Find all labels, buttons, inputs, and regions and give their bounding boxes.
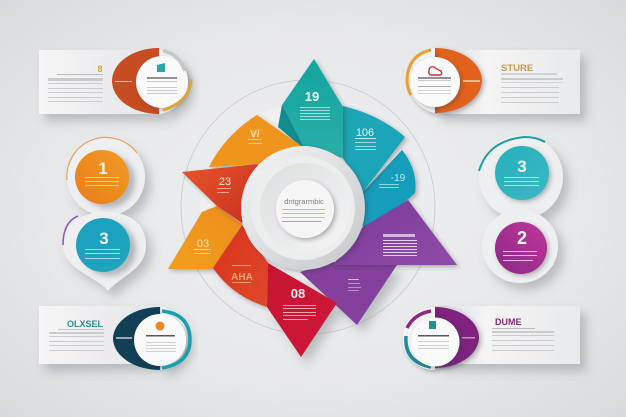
- segment: red 23: 23: [219, 176, 231, 188]
- bubble: orange 1: 1: [98, 159, 108, 178]
- segment: red AHA: [213, 225, 268, 307]
- segment: orange 03: [168, 206, 242, 269]
- bubble: purple 2: [482, 208, 558, 283]
- segment: blue 106: 106: [356, 127, 374, 139]
- banner heading: DUME: [495, 317, 522, 327]
- bubble: teal 3: [63, 212, 146, 291]
- center label: dntgrarmbic: [284, 197, 324, 206]
- segment: blue 106: [343, 106, 405, 192]
- badge: [112, 48, 191, 114]
- segment: red AHA: AHA: [231, 272, 253, 283]
- bubble: orange 1: [67, 137, 145, 216]
- bubble: teal 3 right: 3: [517, 157, 527, 176]
- segment: purple lower: [300, 262, 397, 325]
- badge: [407, 48, 482, 113]
- banner heading: STURE: [501, 63, 533, 74]
- panel: top-left banner: [39, 48, 191, 114]
- banner heading: OLXSEL: [67, 319, 103, 329]
- central backdrop rings: [181, 80, 435, 334]
- bubble: purple 2: 2: [517, 228, 527, 248]
- panel: top-right banner: [407, 48, 580, 114]
- segment: red 23: [182, 164, 258, 223]
- banner heading: 8: [97, 64, 103, 74]
- segment: dark teal fold: [278, 105, 320, 150]
- segment: orange 03: 03: [197, 238, 209, 250]
- bubble: teal 3 right: [479, 135, 563, 219]
- panel: bottom-right banner: [402, 306, 580, 370]
- segment: orange V: [209, 115, 303, 167]
- segment: blue 19: [350, 150, 415, 227]
- segment: crimson 08: [267, 263, 337, 357]
- badge: [402, 307, 479, 370]
- segment: crimson 08: 08: [291, 286, 305, 301]
- segment: teal 19 top: [282, 59, 343, 158]
- badge: [113, 307, 190, 370]
- segment: orange V: V/: [250, 129, 260, 140]
- panel: bottom-left banner: [39, 306, 190, 370]
- segment: purple triangle: [333, 200, 457, 265]
- bubble: teal 3: 3: [99, 229, 109, 248]
- segment: blue 19: -19: [391, 173, 406, 184]
- center disc: [241, 146, 365, 270]
- central radial diagram: [168, 59, 457, 357]
- segment: teal 19 top: 19: [305, 89, 319, 104]
